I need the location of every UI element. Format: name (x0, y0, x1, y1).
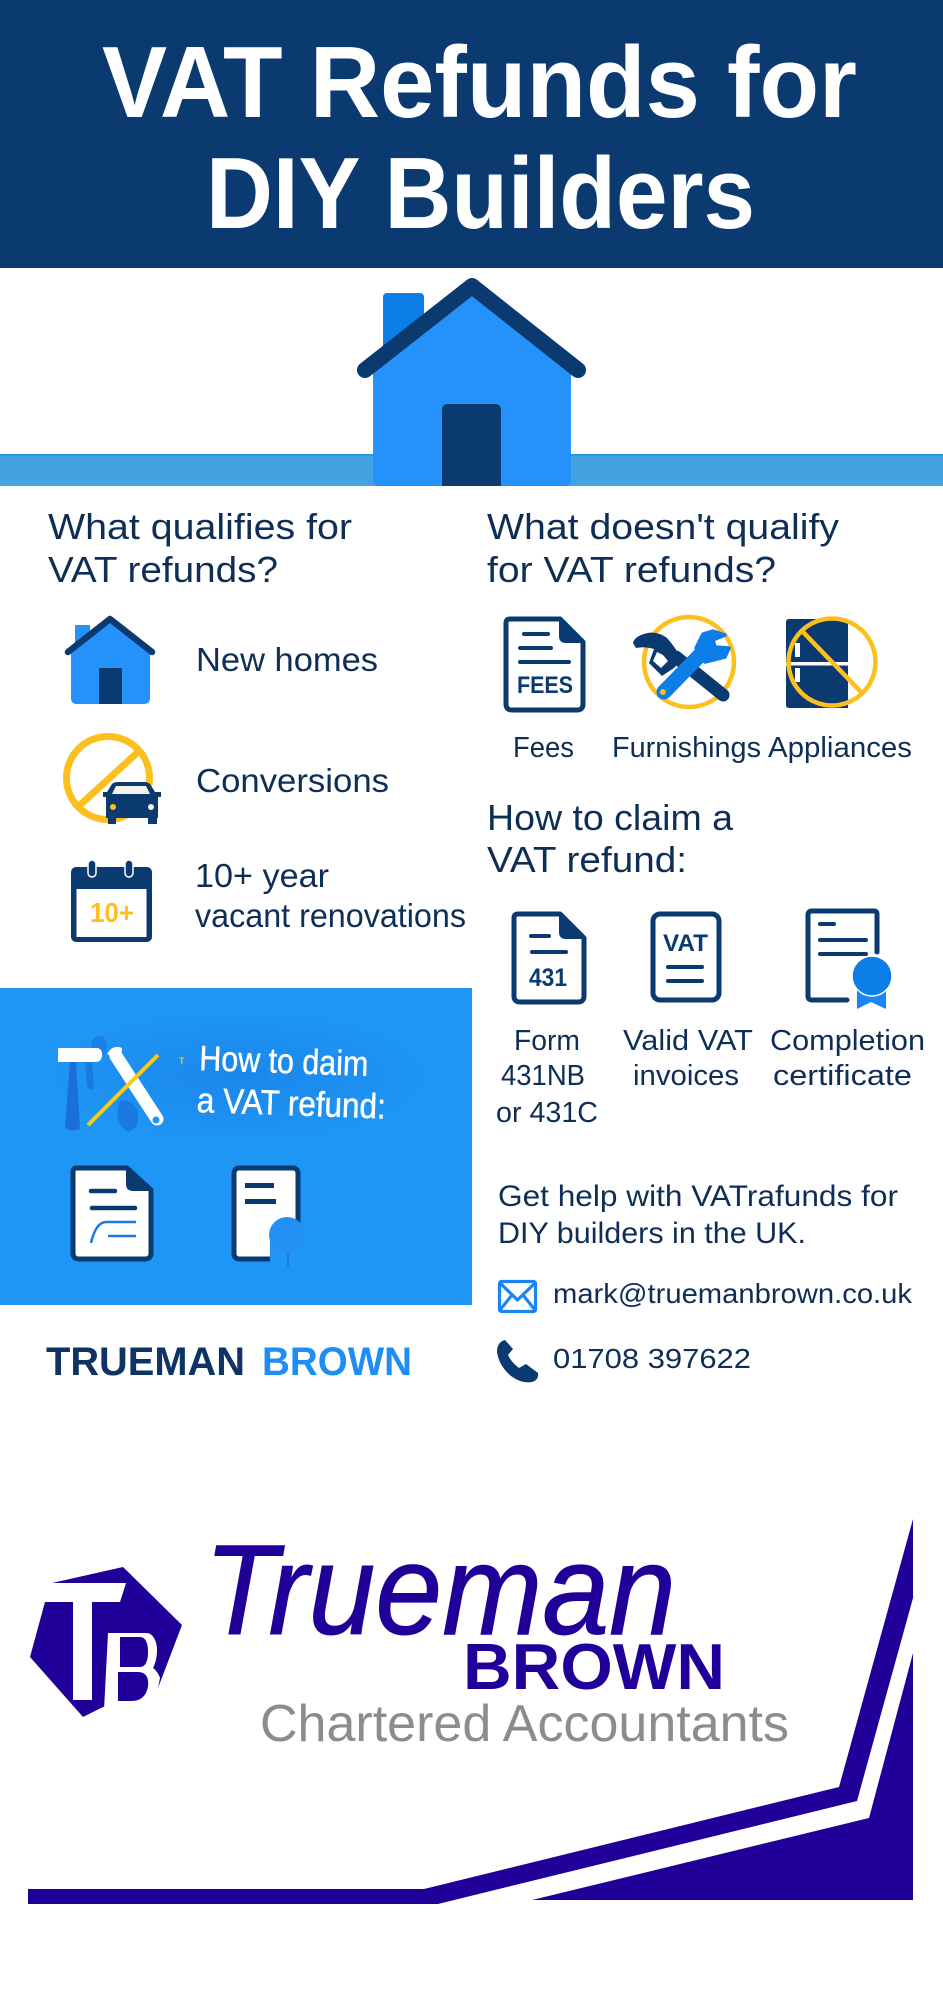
text: how to daim a VAT refund: How to daim (199, 1039, 369, 1084)
logo text: Trueman: Trueman (204, 1519, 676, 1662)
text: get help: DIY builders in the UK. (498, 1217, 806, 1250)
label: new homes: New homes (196, 641, 378, 678)
icon: new home (68, 619, 152, 704)
heading: what qualifies: VAT refunds? (48, 549, 278, 590)
label: valid VAT invoices (623, 1025, 753, 1092)
wordmark: trueman brown: BROWN (262, 1340, 412, 1384)
heading: how to claim: VAT refund: (487, 839, 687, 880)
labels: fees, furnishings, appliances: Fees (513, 732, 574, 764)
icon: VAT invoice: VAT (663, 930, 708, 957)
labels: fees, furnishings, appliances: Appliances (768, 732, 912, 764)
labels: fees, furnishings, appliances: Furnishings (612, 732, 761, 764)
labels: fees, furnishings, appliances (513, 732, 912, 764)
text: get help: Get help with VATrafunds for (498, 1180, 898, 1213)
icon: hammer, wrench and ruler: T (179, 1056, 185, 1066)
panel: blue how-to callout (0, 988, 472, 1305)
icon: envelope (500, 1282, 536, 1312)
text: get help (498, 1180, 898, 1250)
icon: hammer, wrench and ruler (58, 1036, 185, 1132)
wordmark: trueman brown: TRUEMAN (46, 1340, 245, 1384)
heading: how to claim (487, 797, 734, 880)
icon: completion certificate (808, 911, 892, 1009)
label: 10+ year vacant renovations: 10+ year (195, 857, 329, 894)
label: form 431NB or 431C: 431NB (501, 1060, 585, 1092)
label: conversions: Conversions (196, 762, 389, 799)
icon: calendar 10+ (71, 860, 152, 942)
label: completion certificate (770, 1025, 925, 1092)
icon: crossed-out fridge (786, 618, 876, 708)
heading: what qualifies (48, 506, 352, 590)
title (102, 27, 857, 250)
title: DIY Builders (206, 138, 755, 250)
hero house with ground band (0, 286, 943, 486)
label: completion certificate: certificate (773, 1060, 912, 1092)
logo text: chartered accountants: Chartered Accountants (260, 1695, 789, 1753)
text: email: mark@truemanbrown.co.uk (553, 1278, 913, 1309)
heading: what doesn't qualify: for VAT refunds? (487, 549, 776, 590)
icon: fees document: FEES (517, 672, 573, 699)
label: valid VAT invoices: Valid VAT (623, 1025, 753, 1057)
heading: what qualifies: What qualifies for (48, 506, 352, 547)
panel: what doesn't qualify (487, 506, 912, 764)
logo: trueman brown chartered accountants (28, 1519, 913, 1904)
wordmark: trueman brown (46, 1340, 412, 1384)
label: form 431NB or 431C: or 431C (496, 1097, 598, 1129)
icon: conversions (66, 736, 161, 824)
icon: calendar 10+: 10+ (90, 897, 134, 928)
text: phone number: 01708 397622 (553, 1343, 751, 1374)
label: form 431NB or 431C (496, 1025, 598, 1129)
heading: what doesn't qualify (487, 506, 839, 590)
logo swoosh (28, 1519, 913, 1904)
text: how to daim a VAT refund (196, 1039, 388, 1127)
panel: what qualifies (48, 506, 466, 942)
icon: fees document (506, 619, 583, 710)
logo text: BROWN: BROWN (463, 1630, 725, 1703)
title: VAT Refunds for (102, 27, 857, 139)
text: how to daim a VAT refund: a VAT refund: (196, 1081, 387, 1127)
icon: form 431: 431 (529, 964, 567, 992)
icon: phone (497, 1340, 538, 1382)
label: valid VAT invoices: invoices (633, 1060, 739, 1092)
icon: VAT invoice (653, 914, 719, 1000)
heading: how to claim: How to claim a (487, 797, 734, 838)
icon: form 431 (514, 914, 584, 1002)
icon: certificate with blue seal (234, 1168, 305, 1268)
panel: how to claim (487, 797, 925, 1129)
label: 10+ year vacant renovations (195, 857, 466, 934)
header banner (0, 0, 943, 268)
logo emblem: TB hexagon (30, 1567, 182, 1717)
heading: what doesn't qualify: What doesn't qualify (487, 506, 839, 547)
icon: crossed wrenches (633, 617, 734, 707)
label: completion certificate: Completion (770, 1025, 925, 1057)
label: form 431NB or 431C: Form (514, 1025, 580, 1057)
icon: document (73, 1168, 151, 1259)
contact block (497, 1180, 913, 1382)
label: 10+ year vacant renovations: vacant renovations (195, 897, 466, 934)
